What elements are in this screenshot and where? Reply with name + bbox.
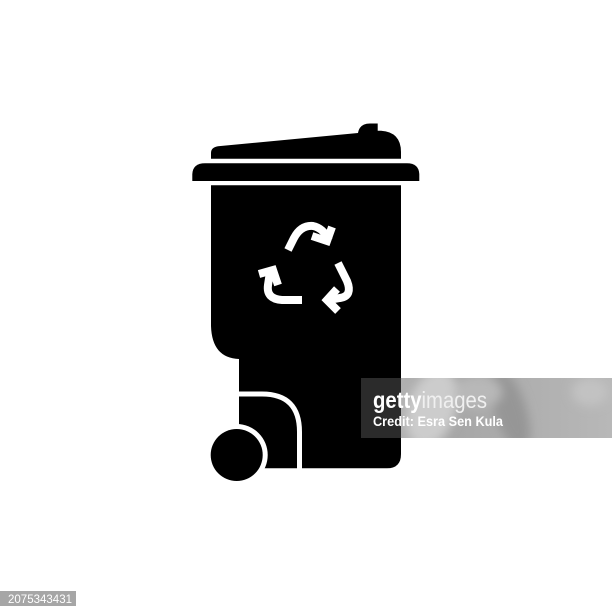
- lid brim: [192, 163, 419, 181]
- icon: recycling arrows: [259, 226, 349, 311]
- recycling arrow right: [327, 263, 349, 311]
- wheel: [206, 424, 268, 486]
- image id tag: 2075343431: [8, 594, 72, 606]
- illustration canvas: [0, 124, 612, 606]
- watermark logo: gettyimages: [373, 387, 487, 413]
- watermark panel: [361, 378, 612, 438]
- bin lid: [211, 124, 401, 159]
- bin body: [211, 185, 401, 468]
- recycling arrow top: [288, 226, 332, 250]
- icon: recycling wheelie bin: [192, 124, 419, 486]
- image id tag: [0, 591, 76, 606]
- wheel housing line: [239, 394, 300, 469]
- recycling arrow left: [259, 270, 302, 300]
- watermark: [361, 378, 612, 438]
- watermark credit: Credit: Esra Sen Kula: [373, 413, 503, 429]
